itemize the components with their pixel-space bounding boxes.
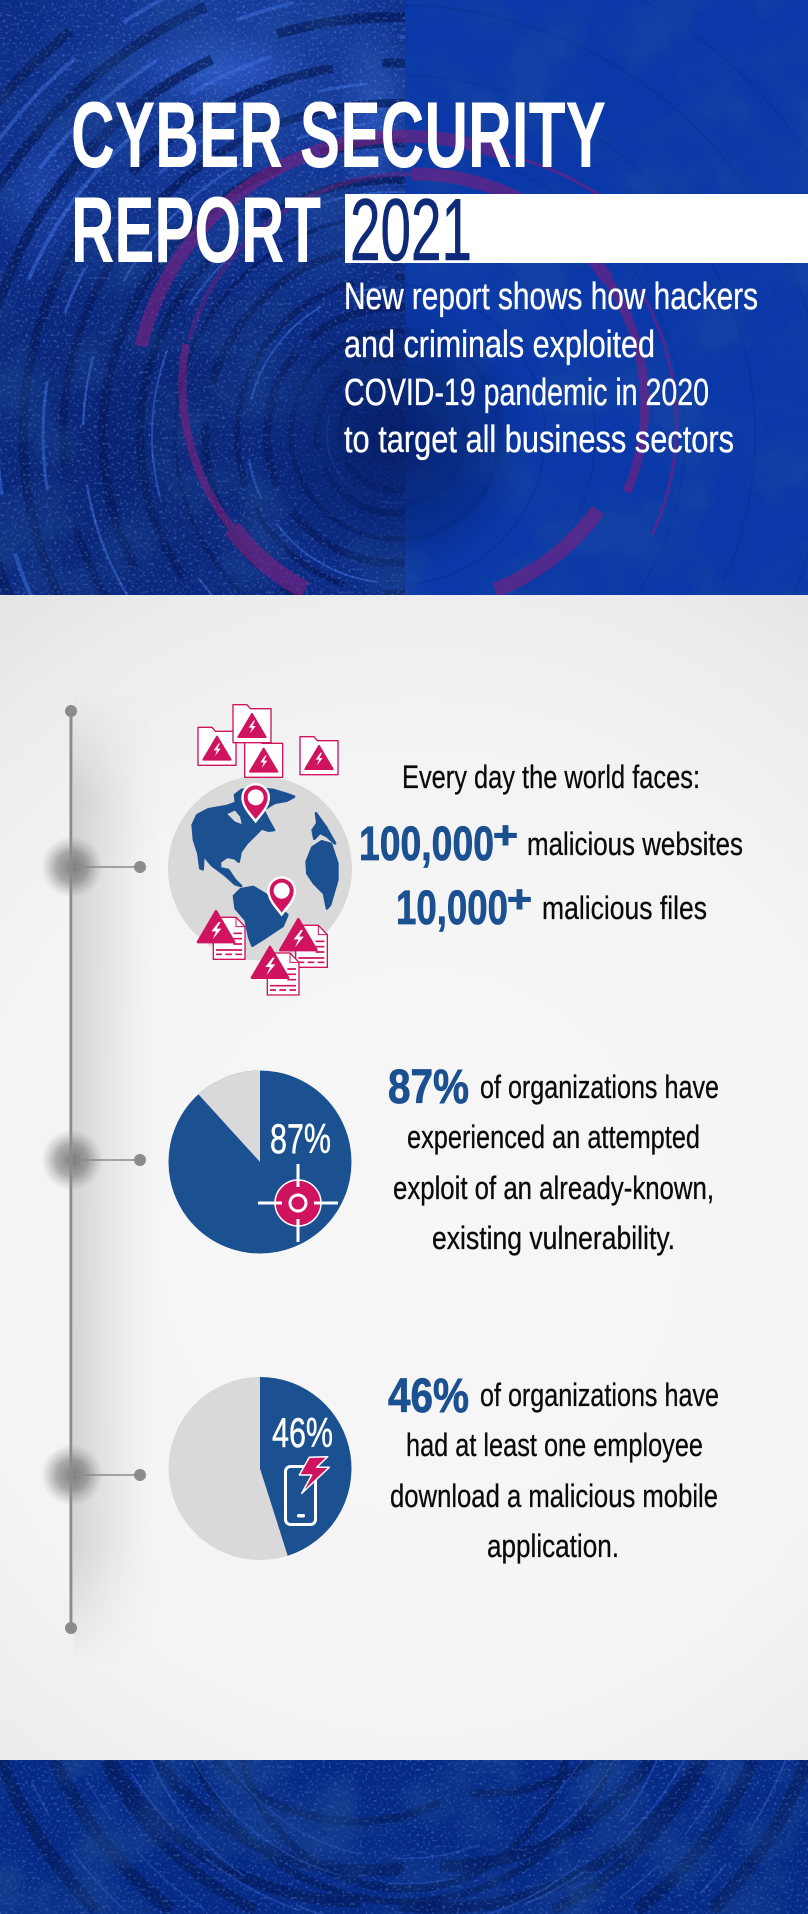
stat block: 87%: of organizations have [480,1069,719,1105]
pie chart: 87%: 87% [270,1115,331,1162]
stat block: 87%: 87% [388,1061,469,1114]
white bar with year: 2021 [350,180,472,279]
white bar with year [345,180,808,279]
stat block: 46%: of organizations have [480,1377,719,1413]
pie chart: 87% [168,1070,352,1254]
stat block: daily threats: 10,000 [396,882,508,935]
stat block: 87%: exploit of an already-known, [393,1170,714,1206]
stat block: 46%: download a malicious mobile [390,1478,718,1514]
footer banner: textured blue background [0,1760,808,1914]
stat block: daily threats: + [493,815,518,857]
stat block: 87%: existing vulnerability. [432,1220,675,1256]
stat block: daily threats: + [507,879,532,921]
stat block: daily threats: malicious files [542,890,707,926]
stat block: 46%: had at least one employee [406,1427,703,1463]
stat block: 46%: 46% [388,1370,469,1423]
title: REPORT [71,177,321,282]
stat block: daily threats: Every day the world faces: [402,759,700,795]
icon: target [258,1164,338,1242]
decorative target rings in header [141,136,676,590]
stat block: daily threats: malicious websites [527,826,743,862]
title [71,82,606,282]
page background [0,595,808,1760]
timeline [43,705,146,1635]
subtitle: and criminals exploited [344,324,655,366]
stat block: 87% [388,1061,719,1256]
pie chart: 46%: 46% [272,1409,333,1456]
stat block: 46%: application. [487,1528,619,1564]
stat block: daily threats [359,759,743,935]
header banner: textured blue background [0,0,808,595]
subtitle [344,276,758,461]
stat block: daily threats: 100,000 [359,818,494,871]
stat block: 87%: experienced an attempted [407,1119,700,1155]
pie chart: 46% [168,1377,352,1560]
icon: globe with malicious folders and files [168,705,352,995]
icon: phone with lightning bolt [286,1457,329,1524]
stat block: 46% [388,1370,719,1564]
